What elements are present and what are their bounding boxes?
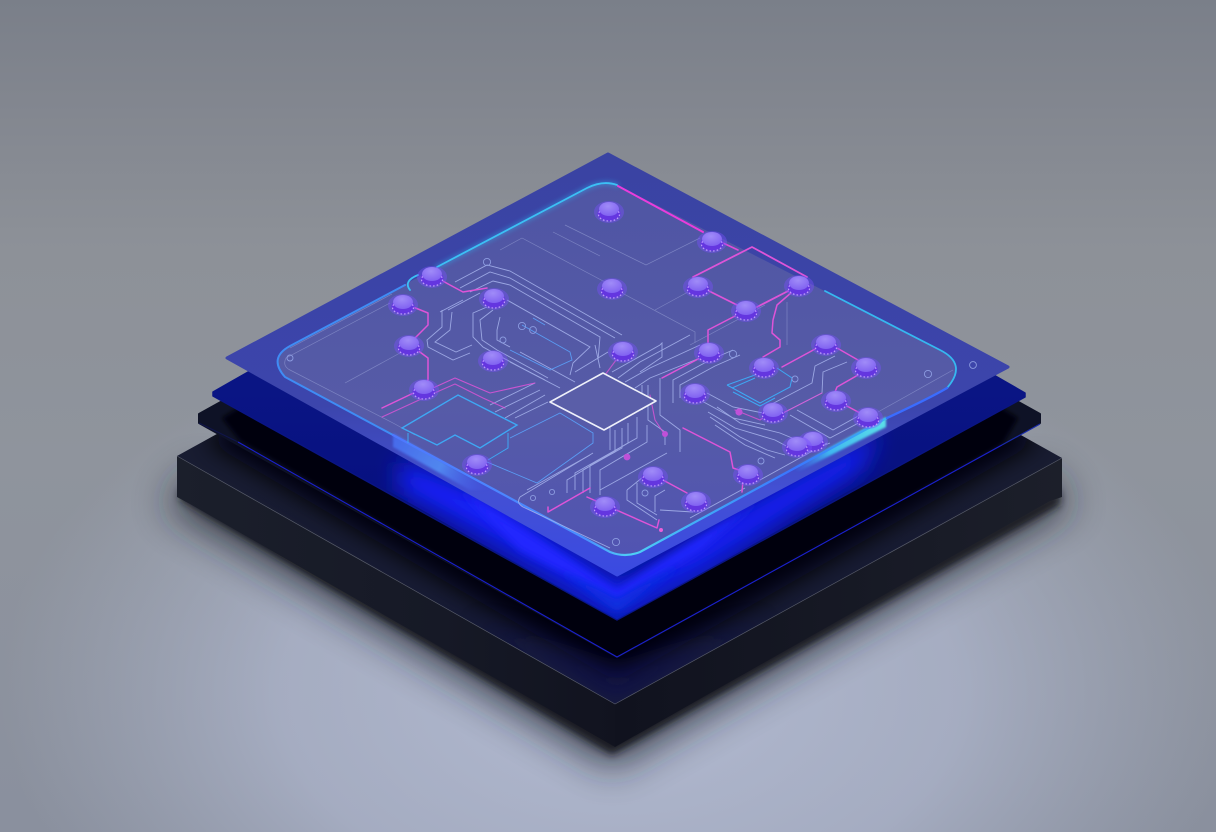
component nodes (388, 201, 883, 518)
right cyan highlight (790, 417, 886, 471)
bright blue module outline (402, 368, 792, 460)
floor shadow (165, 470, 1072, 768)
neon outline (278, 183, 956, 555)
small blue module on the right (727, 368, 792, 403)
base left face (177, 456, 615, 747)
left glow highlight (393, 433, 492, 490)
top plate (227, 154, 1008, 575)
faint panel outlines (285, 225, 953, 435)
third layer: dark plate (198, 401, 1041, 658)
underglow (400, 430, 880, 610)
shadow cast by blue layer (222, 408, 1018, 656)
small vias and pads (287, 258, 976, 546)
base block (177, 434, 1062, 747)
bundled lavender traces (427, 265, 868, 548)
base top face (177, 212, 1062, 704)
base right face (615, 458, 1062, 747)
magenta traces (382, 247, 860, 528)
inner panel (278, 183, 956, 555)
central chip (550, 373, 656, 430)
second layer: blue plate with glow (212, 371, 1026, 621)
glowing edge of third layer (238, 442, 1002, 657)
plate surface (227, 154, 1008, 575)
blue circuit rectangles (487, 318, 593, 483)
